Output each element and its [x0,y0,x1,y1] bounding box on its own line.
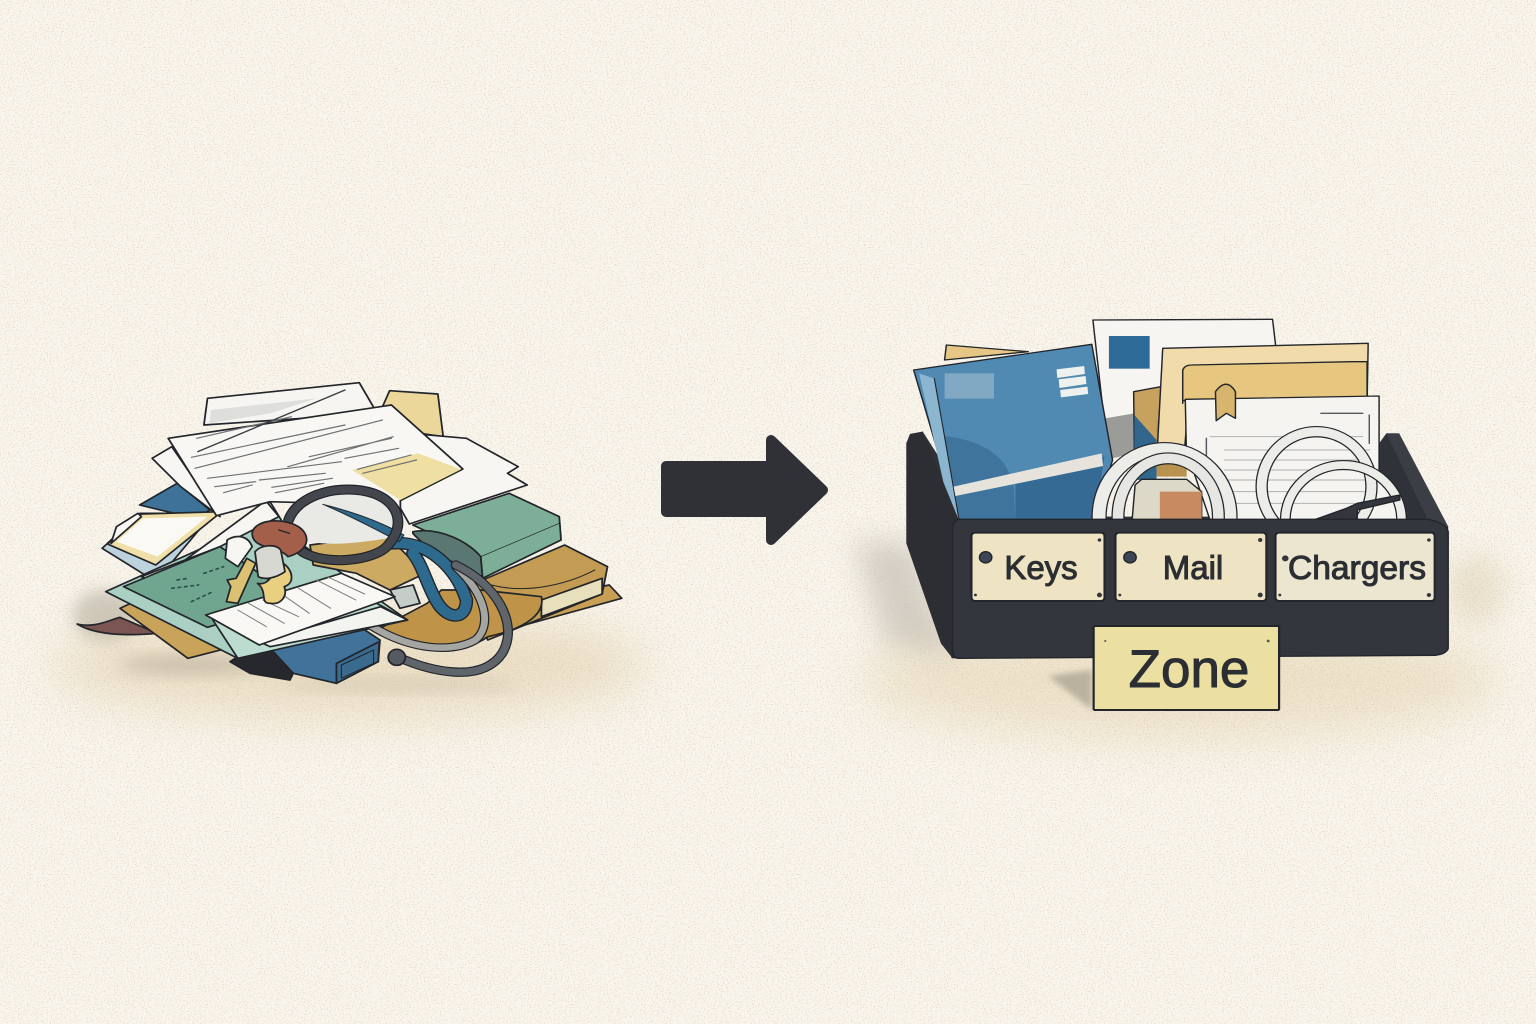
Zone sign [1094,626,1279,710]
blue bottom book [230,627,380,683]
pale green sheet front [213,602,407,658]
right white cable coil [1255,426,1407,519]
charger brick [1132,479,1202,523]
left cream folder [107,512,222,565]
handwriting marks [172,567,224,602]
small front sheets [206,573,407,647]
white envelope [1093,319,1276,458]
green book [413,493,561,578]
tan book pages [541,578,602,617]
main paper sheets [152,390,463,527]
cream folder [1157,343,1368,450]
left blue folder [102,513,213,582]
yellow back sheet [382,391,443,437]
black ring cable [289,490,398,560]
label: Zone: Zone [1129,640,1249,699]
left white cable coil [1091,442,1238,519]
tan rounded folder [380,590,542,650]
right under sheets [384,433,527,524]
ground shadow: tray [855,542,1505,740]
white sheet edge [141,501,279,582]
ring interior [289,490,398,544]
tan lower board [470,585,622,640]
small tan folder [1134,387,1187,480]
blue cable [391,543,466,615]
tray contents [912,318,1407,519]
pale green folder [106,502,407,658]
dark leaf under pile [77,617,157,635]
white key tag [225,537,252,567]
arrow [666,440,823,540]
label: Chargers: Chargers [1288,549,1426,586]
tan folder [1183,362,1367,403]
bookmark [1215,384,1235,421]
tray left wall [906,432,959,658]
tan bottom folder [120,602,227,658]
red key fob [252,521,307,557]
left white card [116,517,207,557]
small grey book pages [390,585,420,608]
tray right wall [1386,433,1448,527]
tray art [906,319,1448,710]
brass key [226,546,292,604]
blue book [914,344,1113,523]
illustration: organized tray [906,319,1448,710]
tan flap [310,535,425,590]
label: Mail: Mail [1163,549,1223,586]
cable plug [388,649,405,665]
tan back paper [945,345,1028,360]
blue small book [140,483,210,518]
back paper shading [209,398,316,423]
tan book [459,545,607,640]
tray front face [953,519,1448,658]
back paper [204,383,377,425]
ground shadow: pile [50,589,650,720]
green inner folder [124,547,299,627]
grey cables [370,565,508,672]
Chargers plate [1275,533,1435,601]
Keys plate [971,533,1105,601]
illustration: messy pile [77,383,622,683]
blue tapered cable end [323,504,404,542]
tray back interior [906,432,1448,658]
black plug [1314,495,1400,520]
Mail plate [1115,533,1266,601]
white document [1185,396,1405,520]
left white sheet [111,513,141,543]
label: Keys: Keys [1004,549,1078,586]
